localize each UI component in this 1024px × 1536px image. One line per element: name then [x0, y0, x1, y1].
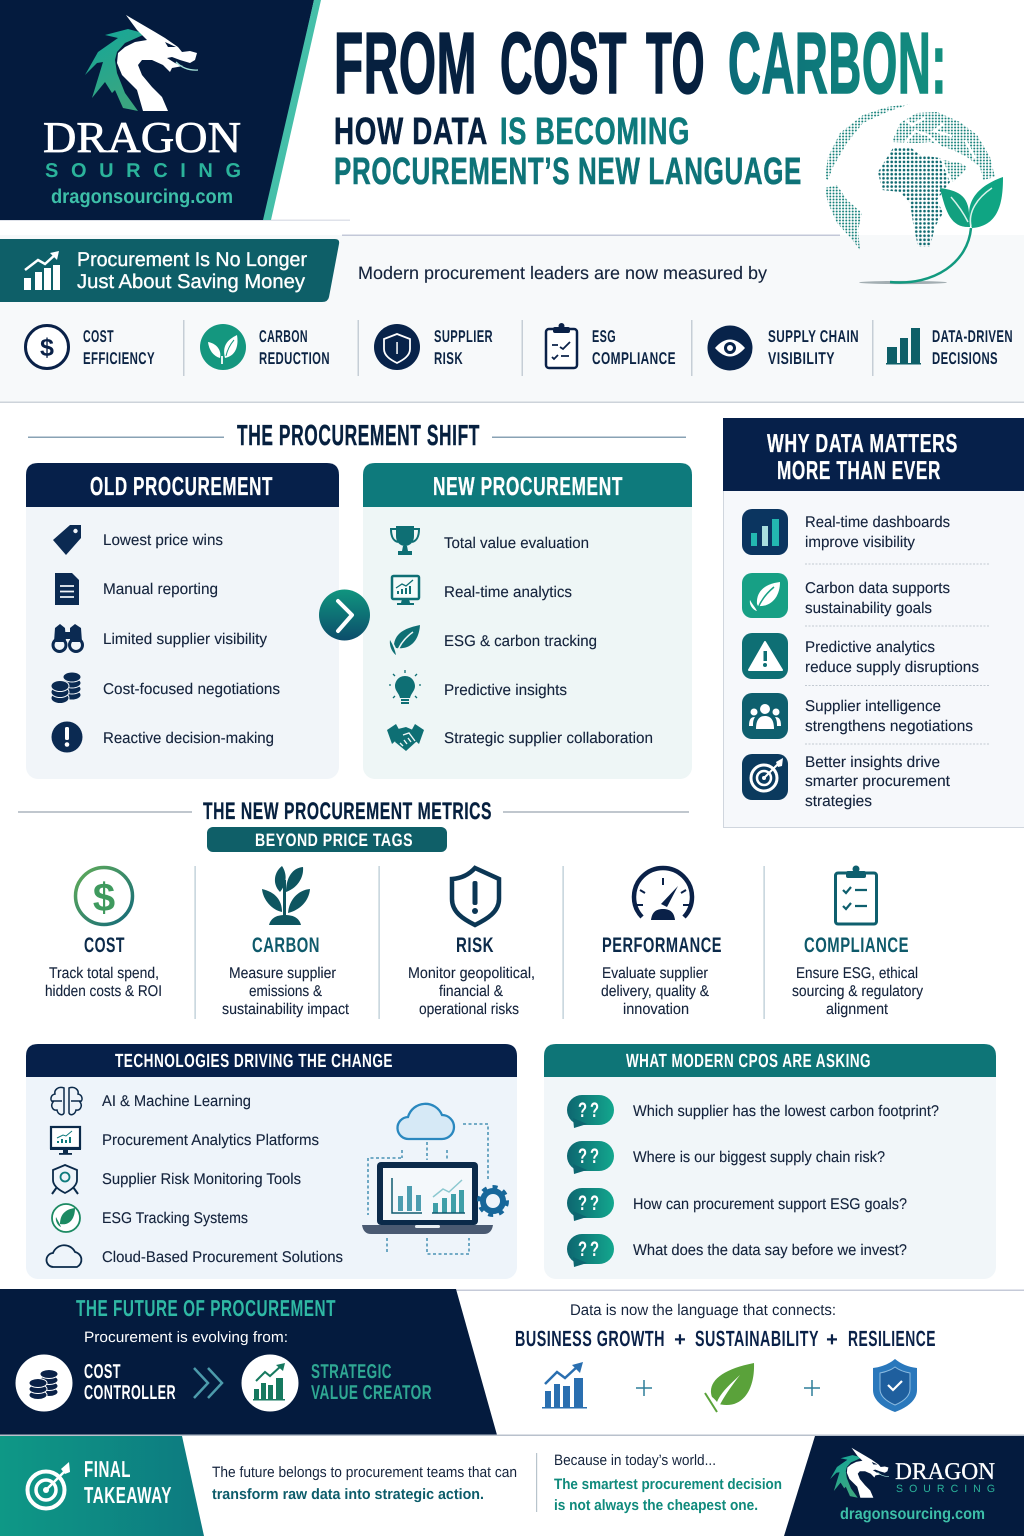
footer brand name: DRAGON	[895, 1459, 995, 1485]
rule under header	[342, 234, 840, 236]
metric: carbon: emissions &	[249, 983, 323, 1000]
row: lowest price wins: Lowest price wins	[103, 532, 223, 549]
row: limited supplier visibility: Limited supplier visibility	[103, 631, 267, 648]
question: supply chain risk	[567, 1141, 885, 1174]
row: manual reporting: Manual reporting	[103, 581, 218, 598]
text: growth sustainability resilience	[515, 1326, 936, 1351]
row: esg and carbon tracking	[390, 625, 597, 655]
question: lowest carbon footprint: Which supplier has the lowest carbon footprint?	[633, 1103, 939, 1120]
illustration: laptop and cloud	[362, 1104, 507, 1254]
metric: performance	[601, 868, 722, 1018]
reason: predictive analytics	[742, 633, 979, 679]
panel: what modern cpos are asking	[544, 1044, 996, 1279]
metric: carbon: Measure supplier	[229, 965, 336, 982]
text: cost controller	[84, 1361, 176, 1404]
text: growth sustainability resilience: +	[826, 1329, 838, 1351]
question: esg goals: ??	[578, 1192, 602, 1215]
measure: esg compliance	[546, 323, 676, 368]
metric: risk: RISK	[456, 934, 494, 957]
row: strategic supplier collaboration	[387, 724, 653, 751]
text: final takeaway: TAKEAWAY	[84, 1482, 172, 1508]
reason: carbon data	[742, 573, 950, 618]
text: future belongs: The future belongs to procurement teams that can	[212, 1464, 517, 1481]
measure: supplier risk: SUPPLIER	[434, 327, 493, 346]
text: smartest decision	[554, 1452, 782, 1514]
icon: dragon logo	[85, 15, 198, 111]
tech: ai and machine learning	[51, 1087, 251, 1115]
metric: performance: delivery, quality &	[601, 983, 710, 1000]
header: cpos: WHAT MODERN CPOS ARE ASKING	[626, 1051, 871, 1072]
text: strategic value creator: STRATEGIC	[311, 1361, 392, 1383]
measure: carbon reduction: CARBON	[259, 327, 308, 346]
title: COST	[500, 15, 627, 112]
icon: green leaf	[705, 1363, 754, 1412]
metric: cost	[45, 868, 162, 1000]
metric: risk: operational risks	[419, 1001, 519, 1018]
question: data before invest	[567, 1234, 907, 1267]
icon: dotted globe with leaf	[825, 104, 1003, 284]
reason: dashboards: improve visibility	[805, 534, 915, 551]
text: final takeaway	[84, 1456, 172, 1508]
banner text: Procurement Is No Longer	[77, 249, 307, 271]
panel: new procurement	[363, 463, 692, 779]
metric: performance: PERFORMANCE	[602, 934, 722, 957]
measure: cost efficiency: EFFICIENCY	[83, 349, 155, 368]
panel: final takeaway	[0, 1436, 204, 1536]
header: why data matters	[767, 428, 958, 485]
reason: better insights: strategies	[805, 793, 872, 810]
row: lowest price wins	[53, 525, 223, 555]
reason: carbon data: Carbon data supports	[805, 580, 950, 597]
question: esg goals	[567, 1188, 907, 1221]
arrow: double chevron	[194, 1368, 222, 1398]
metric: cost: Track total spend,	[49, 965, 159, 982]
header: why data matters: MORE THAN EVER	[777, 455, 941, 485]
title: FROM	[334, 15, 477, 112]
text: strategic value creator	[311, 1361, 432, 1404]
row: reactive decision-making: Reactive decision-making	[103, 730, 274, 747]
row: reactive decision-making	[52, 722, 274, 752]
question: data before invest: ??	[578, 1238, 602, 1261]
badge: beyond price tags: BEYOND PRICE TAGS	[255, 830, 413, 850]
footer sub-name: SOURCING	[896, 1483, 995, 1495]
heading: future of procurement: THE FUTURE OF PROCUREMENT	[76, 1295, 336, 1321]
icon: blue shield	[873, 1359, 917, 1412]
text: cost controller: CONTROLLER	[84, 1382, 176, 1404]
text: data connects: Data is now the language that connects:	[570, 1302, 836, 1319]
text: growth sustainability resilience: RESILIENCE	[848, 1326, 936, 1351]
row: cost-focused negotiations	[51, 672, 280, 704]
tech: risk monitoring: Supplier Risk Monitoring Tools	[102, 1171, 301, 1188]
metric: compliance	[792, 866, 923, 1018]
tech: esg tracking	[52, 1204, 248, 1232]
text: measured by: Modern procurement leaders are now measured by	[358, 263, 767, 283]
measure: esg compliance: COMPLIANCE	[592, 349, 676, 368]
reason: dashboards	[742, 509, 950, 555]
reason: dashboards: Real-time dashboards	[805, 514, 950, 531]
brand url: dragonsourcing.com	[51, 186, 233, 208]
metric: compliance: alignment	[826, 1001, 889, 1018]
tech: cloud	[46, 1245, 343, 1267]
panel: future of procurement	[0, 1289, 497, 1435]
tech: cloud: Cloud-Based Procurement Solutions	[102, 1249, 343, 1266]
text: strategic value creator: VALUE CREATOR	[311, 1382, 432, 1404]
row: esg and carbon tracking: ESG & carbon tracking	[444, 633, 597, 650]
banner: no longer just saving money	[0, 239, 339, 302]
measure: cost efficiency: $	[40, 334, 54, 362]
footer url: dragonsourcing.com	[840, 1506, 985, 1523]
row: cost-focused negotiations: Cost-focused negotiations	[103, 681, 280, 698]
row: real-time analytics: Real-time analytics	[444, 584, 572, 601]
metric: risk	[408, 868, 535, 1018]
text: growth sustainability resilience: +	[674, 1329, 686, 1351]
measure: supply chain visibility: SUPPLY CHAIN	[768, 327, 859, 346]
subtitle: HOW DATA	[334, 111, 488, 153]
icon: dragon logo small	[830, 1448, 889, 1498]
metric: cost: COST	[84, 934, 125, 957]
brand sub-name: SOURCING	[45, 160, 241, 182]
text: growth sustainability resilience: BUSINESS GROWTH	[515, 1326, 665, 1351]
panel: why data matters	[723, 418, 1024, 828]
subtitle: IS BECOMING	[500, 111, 690, 153]
row: real-time analytics	[392, 576, 572, 605]
text: future belongs	[212, 1464, 517, 1503]
icon: coins	[16, 1354, 72, 1412]
measure: carbon reduction	[200, 324, 330, 370]
metric: compliance: Ensure ESG, ethical	[796, 965, 918, 982]
tech: esg tracking: ESG Tracking Systems	[102, 1210, 248, 1227]
row: predictive insights: Predictive insights	[444, 682, 567, 699]
heading: the procurement shift: THE PROCUREMENT SHIFT	[237, 420, 480, 452]
reason: better insights: smarter procurement	[805, 773, 951, 790]
brand name: DRAGON	[43, 113, 241, 162]
question: supply chain risk: ??	[578, 1145, 602, 1168]
panel: leader measures	[26, 320, 1013, 376]
measure: cost efficiency	[26, 326, 155, 368]
measure: supplier risk: RISK	[434, 349, 463, 368]
metric: carbon: CARBON	[252, 934, 320, 957]
metric: performance: innovation	[623, 1001, 689, 1018]
text: growth sustainability resilience: SUSTAINABILITY	[695, 1326, 819, 1351]
tech: risk monitoring	[52, 1165, 301, 1194]
question: supply chain risk: Where is our biggest supply chain risk?	[633, 1149, 885, 1166]
text: smartest decision: is not always the cheapest one.	[554, 1497, 758, 1514]
rule above takeaway band	[0, 1434, 1024, 1436]
panel: metrics	[45, 866, 923, 1019]
metric: compliance: sourcing & regulatory	[792, 983, 923, 1000]
measure: esg compliance: ESG	[592, 327, 616, 346]
panel: data connects	[515, 1302, 936, 1412]
plus sign	[804, 1380, 820, 1396]
text: cost controller: COST	[84, 1361, 121, 1383]
row: total value evaluation: Total value evaluation	[444, 535, 589, 552]
reason: better insights: Better insights drive	[805, 754, 940, 771]
panel: brand header	[0, 0, 321, 220]
header: technologies: TECHNOLOGIES DRIVING THE CHANGE	[115, 1051, 393, 1072]
text: final takeaway: FINAL	[84, 1456, 131, 1482]
metric: risk: Monitor geopolitical,	[408, 965, 535, 982]
reason: carbon data: sustainability goals	[805, 600, 932, 617]
row: limited supplier visibility	[53, 624, 267, 652]
question: data before invest: What does the data say before we invest?	[633, 1242, 907, 1259]
text: smartest decision: Because in today’s world...	[554, 1452, 716, 1469]
icon: growth chart	[24, 251, 60, 290]
question: esg goals: How can procurement support ESG goals?	[633, 1196, 907, 1213]
metric: cost: $	[93, 876, 115, 920]
measure: carbon reduction: REDUCTION	[259, 349, 330, 368]
row: strategic supplier collaboration: Strategic supplier collaboration	[444, 730, 653, 747]
row: predictive insights	[389, 670, 567, 704]
metric: cost: hidden costs & ROI	[45, 983, 162, 1000]
tech: ai and machine learning: AI & Machine Learning	[102, 1093, 251, 1110]
icon: blue growth chart	[542, 1362, 587, 1408]
metric: carbon: sustainability impact	[222, 1001, 350, 1018]
arrow: old to new	[319, 590, 370, 640]
tech: analytics platforms	[50, 1127, 319, 1155]
header: new procurement: NEW PROCUREMENT	[433, 471, 623, 501]
subtitle: PROCUREMENT’S NEW LANGUAGE	[334, 151, 802, 193]
reason: supplier intelligence: Supplier intelligence	[805, 698, 941, 715]
rule above future band	[456, 1290, 1024, 1291]
tech: analytics platforms: Procurement Analytics Platforms	[102, 1132, 319, 1149]
title	[334, 15, 947, 112]
reason: predictive analytics: reduce supply disruptions	[805, 659, 979, 676]
banner: no longer just saving money: Just About Saving Money	[77, 271, 305, 293]
reason: predictive analytics: Predictive analytics	[805, 639, 935, 656]
title: TO	[646, 15, 705, 112]
reason: supplier intelligence: strengthens negotiations	[805, 718, 973, 735]
panel: footer brand	[784, 1436, 1024, 1536]
metric: carbon	[222, 866, 350, 1018]
reason: supplier intelligence	[742, 693, 973, 739]
panel: technologies	[26, 1044, 517, 1279]
measure: data-driven decisions	[886, 327, 1013, 368]
text: future belongs: transform raw data into strategic action.	[212, 1486, 484, 1503]
row: total value evaluation	[391, 526, 589, 555]
icon: target	[28, 1462, 70, 1508]
metric: performance: Evaluate supplier	[602, 965, 708, 982]
row: manual reporting	[55, 573, 218, 605]
text: evolving from: Procurement is evolving from:	[84, 1329, 288, 1346]
measure: supplier risk	[374, 324, 493, 370]
header: old procurement: OLD PROCUREMENT	[90, 471, 273, 501]
text: smartest decision: The smartest procurement decision	[554, 1476, 782, 1493]
reason: better insights	[742, 754, 951, 810]
measure: cost efficiency: COST	[83, 327, 114, 346]
panel: old procurement	[26, 463, 339, 779]
measure: supply chain visibility: VISIBILITY	[768, 349, 835, 368]
icon: growth chart	[242, 1354, 298, 1412]
plus sign	[636, 1380, 652, 1396]
metric: risk: financial &	[439, 983, 504, 1000]
metric: compliance: COMPLIANCE	[804, 934, 909, 957]
heading: the new procurement metrics: THE NEW PROCUREMENT METRICS	[203, 798, 492, 825]
subtitle	[334, 111, 802, 193]
question: lowest carbon footprint: ??	[578, 1099, 602, 1122]
measure: supply chain visibility	[708, 326, 859, 370]
question: lowest carbon footprint	[567, 1095, 939, 1128]
badge: beyond price tags	[207, 827, 447, 852]
